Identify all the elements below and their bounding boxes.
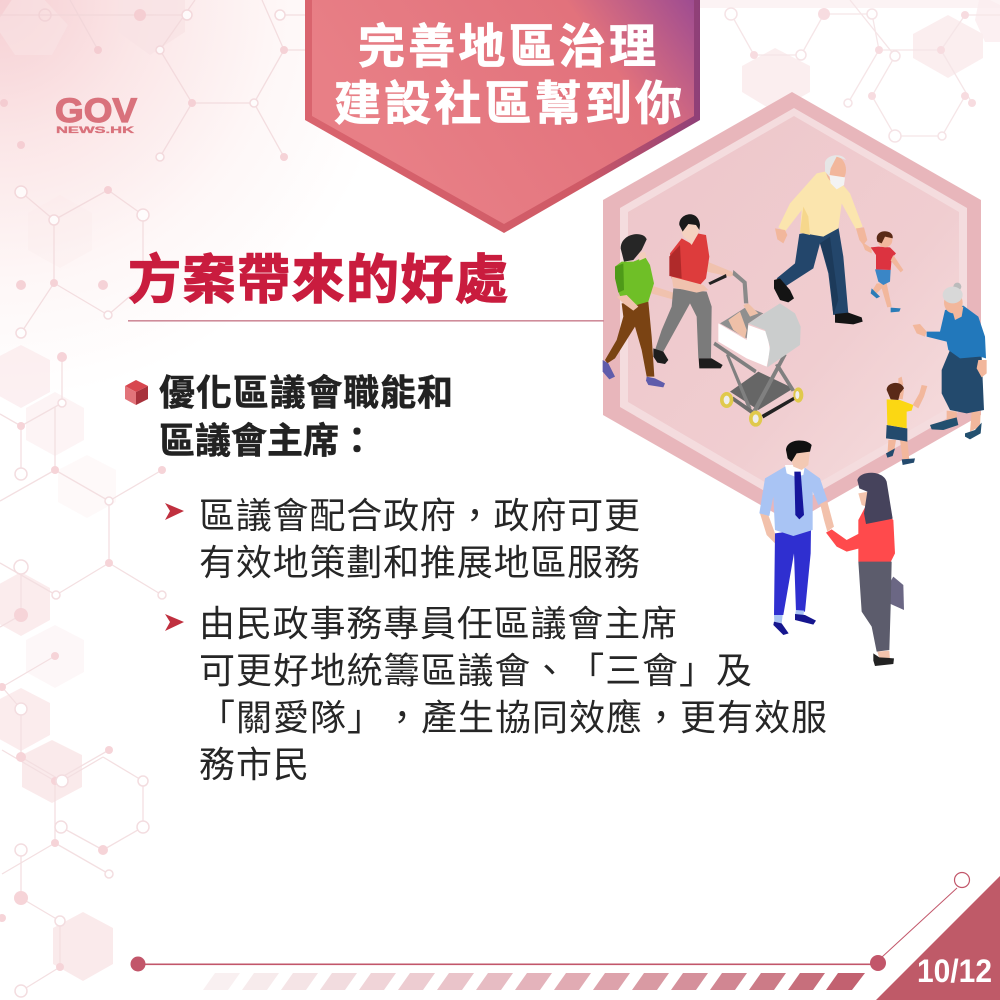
bullet text 1: 區議會配合政府，政府可更 bbox=[199, 495, 640, 536]
man in blue shirt bbox=[759, 440, 834, 635]
woman in red top bbox=[826, 473, 904, 666]
man in red bbox=[653, 214, 735, 368]
footer timeline bbox=[130, 872, 970, 972]
page corner triangle bbox=[876, 876, 1000, 1000]
icon: arrow bullet 1 bbox=[165, 503, 184, 520]
baby stroller bbox=[713, 270, 803, 427]
bullet text 2 bbox=[199, 603, 827, 785]
elderly woman bbox=[913, 283, 987, 439]
woman in green bbox=[603, 234, 683, 387]
elderly man bbox=[774, 155, 867, 324]
background: hexagon network top-left bbox=[0, 0, 305, 161]
background: hexagon network top-right bbox=[700, 0, 1000, 142]
bullet text 1 bbox=[199, 495, 640, 583]
icon: arrow bullet 2 bbox=[165, 614, 184, 631]
footer stripes bbox=[203, 973, 865, 990]
illustration: man and woman shaking hands bbox=[759, 440, 904, 666]
illustration: young family with stroller bbox=[603, 214, 803, 427]
title banner bbox=[305, 0, 700, 233]
background: hexagon network left bbox=[0, 186, 166, 997]
logo: GOV News.HK: GOV bbox=[55, 92, 137, 130]
title line 2: 建設社區幫到你 bbox=[334, 77, 682, 130]
illustration: grandparents and children bbox=[774, 155, 987, 465]
section subheading: 優化區議會職能和 bbox=[159, 372, 453, 413]
background: top-left wash bbox=[0, 0, 400, 400]
bullet text 2: 「關愛隊」，產生協同效應，更有效服 bbox=[199, 697, 827, 738]
bullet text 2: 可更好地統籌區議會、「三會」及 bbox=[199, 650, 752, 691]
large hexagon panel bbox=[603, 92, 981, 523]
icon: cube bullet bbox=[125, 380, 148, 405]
child in yellow bbox=[886, 377, 927, 465]
bullet text 2: 由民政事務專員任區議會主席 bbox=[199, 603, 677, 644]
page number: 10/12 bbox=[917, 953, 992, 989]
child in red bbox=[862, 231, 903, 312]
title line 1: 完善地區治理 bbox=[358, 20, 656, 73]
bullet text 2: 務市民 bbox=[199, 744, 309, 785]
heading underline bbox=[128, 320, 604, 322]
heading: 方案帶來的好處 bbox=[128, 251, 508, 310]
bullet text 1: 有效地策劃和推展地區服務 bbox=[199, 542, 640, 583]
logo: GOV News.HK: NEWS.HK bbox=[56, 125, 135, 135]
section subheading: 區議會主席： bbox=[159, 420, 375, 461]
section subheading bbox=[159, 372, 453, 461]
